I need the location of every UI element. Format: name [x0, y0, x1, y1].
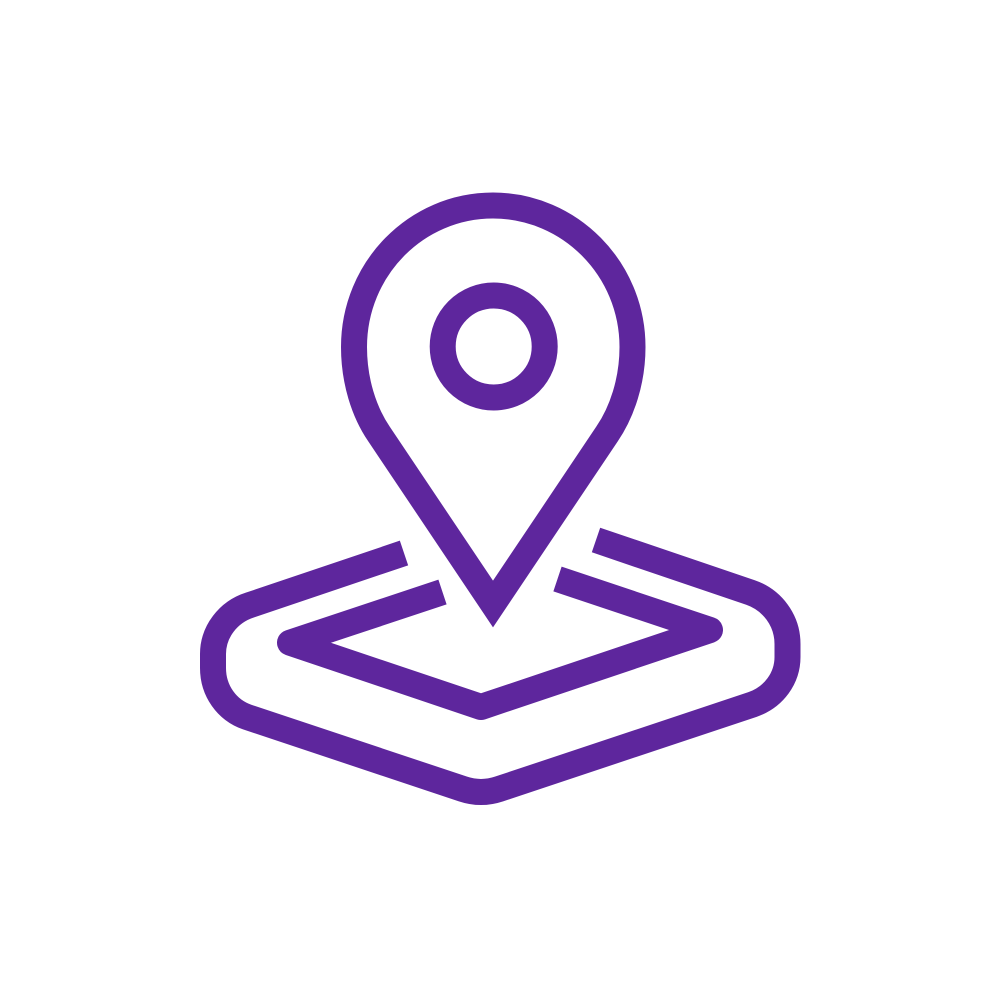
map pin outline [354, 206, 632, 604]
pin inner circle [443, 296, 545, 398]
outer platform outline [213, 540, 788, 792]
inner platform outline [290, 579, 710, 707]
